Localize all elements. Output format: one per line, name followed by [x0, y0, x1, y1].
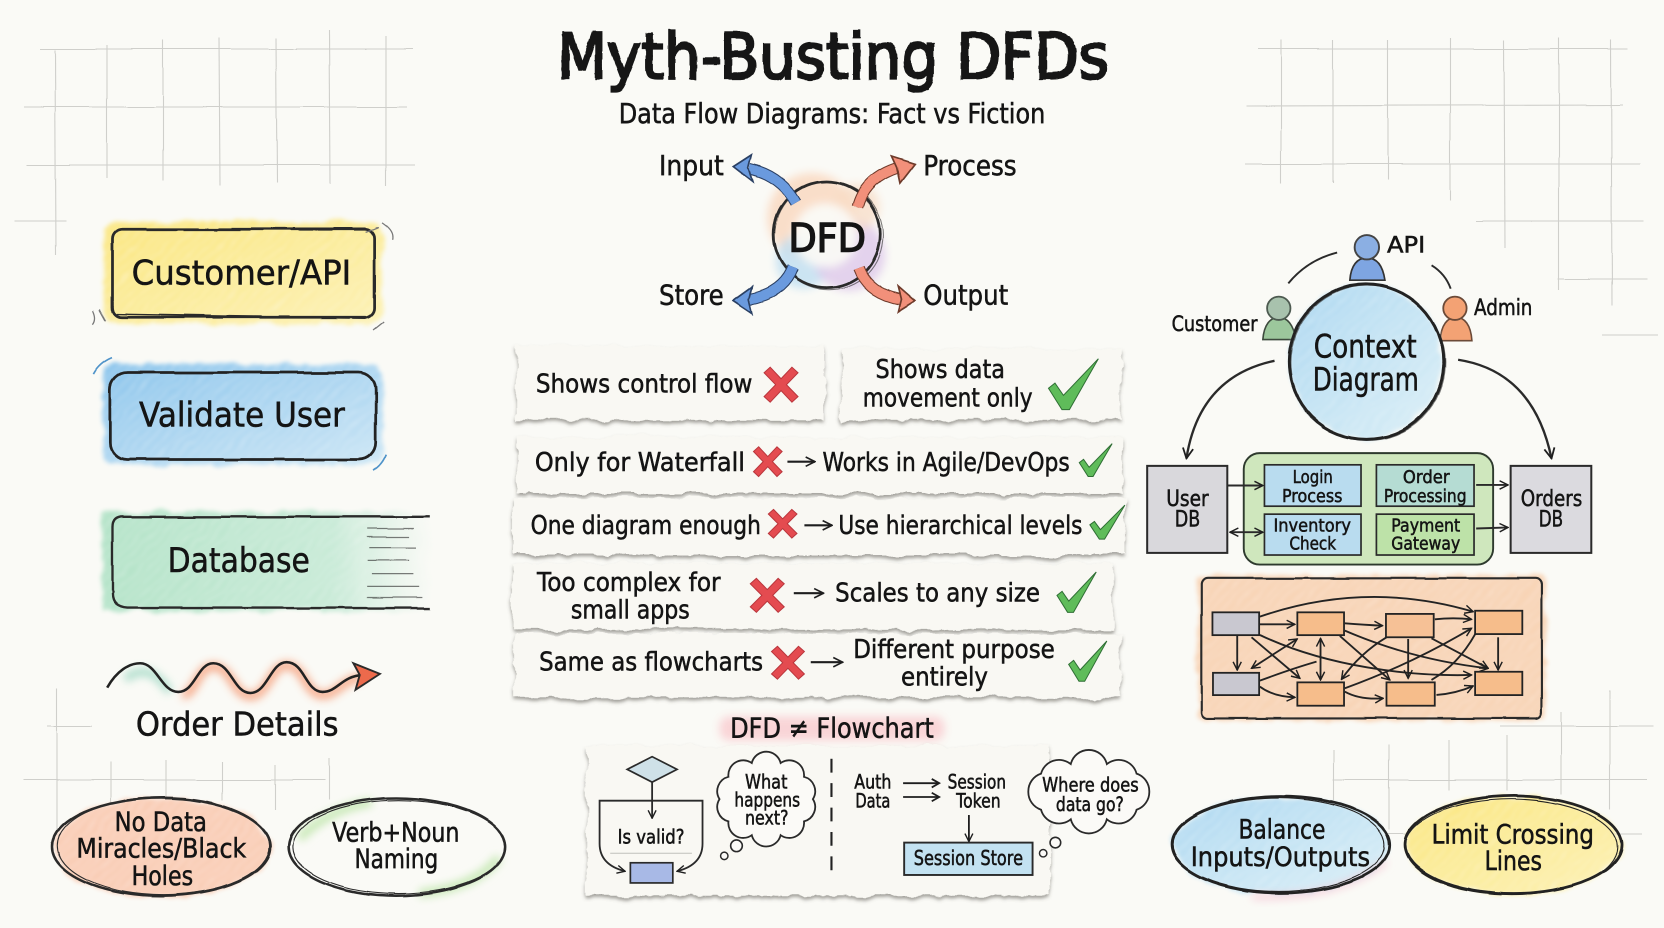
wash — [1173, 797, 1389, 895]
wash — [53, 798, 272, 898]
arrow: store — [733, 267, 793, 313]
text — [1191, 814, 1370, 873]
process: inventory — [1264, 514, 1361, 555]
icon: green check — [1090, 505, 1125, 539]
entity: customer: Customer — [1172, 312, 1258, 337]
thought cloud: what happens next: What — [745, 770, 788, 793]
wash — [1405, 797, 1622, 895]
pink edge — [1252, 862, 1386, 897]
thought cloud: what happens next: happens — [734, 789, 800, 812]
data store label: Database — [168, 541, 310, 581]
process: payment — [1376, 514, 1474, 555]
store: orders db: Orders — [1521, 486, 1582, 512]
process label: Validate User — [139, 396, 345, 436]
tangled nodes — [1212, 611, 1522, 706]
blue wash — [103, 364, 383, 465]
text: shows control flow: Shows control flow — [536, 370, 752, 400]
arrow — [787, 461, 815, 463]
comparison heading — [720, 712, 944, 745]
strip: control flow myth — [517, 346, 825, 420]
thought cloud: where does data go — [1028, 750, 1149, 857]
arrow: output — [859, 267, 915, 312]
legend: external entity — [93, 222, 393, 330]
data flow example: Token — [955, 790, 1001, 813]
process: inventory: Inventory — [1273, 516, 1351, 537]
myth text: Same as flowcharts — [539, 648, 763, 678]
thought cloud: where does data go: Where does — [1042, 774, 1139, 797]
process: payment: Gateway — [1391, 534, 1461, 555]
blue step — [630, 863, 673, 883]
store: orders db — [1511, 466, 1591, 553]
text — [332, 818, 460, 875]
thought cloud: what happens next — [717, 752, 815, 860]
tangled diagram panel — [1197, 575, 1545, 721]
hub label: DFD — [788, 217, 866, 262]
legend: process — [93, 358, 386, 470]
text: shows data movement only: movement only — [863, 383, 1033, 413]
double outline — [93, 223, 393, 330]
green edge wash — [299, 802, 499, 894]
icon: red cross — [764, 367, 798, 402]
data flow example: Auth — [854, 770, 891, 793]
outline — [289, 798, 505, 896]
myth text: small apps — [571, 596, 690, 626]
fact text — [853, 635, 1055, 693]
icon: green check — [1079, 444, 1112, 476]
myth text — [536, 568, 721, 626]
flow colour wash — [125, 665, 363, 696]
decision box outline — [600, 782, 703, 871]
context circle: Context — [1314, 328, 1417, 366]
flow label: Order Details — [136, 704, 339, 743]
flowchart example — [600, 757, 703, 883]
data flow example: Session Store — [914, 846, 1023, 870]
context circle: Diagram — [1313, 361, 1419, 399]
myth text: Only for Waterfall — [535, 448, 745, 478]
entity: API — [1350, 233, 1425, 280]
text: Verb+Noun — [332, 818, 460, 849]
connector arcs — [1186, 253, 1552, 458]
arrow — [811, 661, 843, 663]
rule: verb noun naming — [289, 798, 505, 896]
entity label: Customer/API — [132, 253, 351, 293]
text: Balance — [1238, 814, 1325, 845]
process: order — [1376, 465, 1474, 507]
hub circle wash — [767, 173, 885, 291]
process: order: Order — [1403, 467, 1450, 488]
strip: flowcharts — [515, 634, 1121, 697]
myth text: Too complex for — [536, 568, 721, 598]
process: payment: Payment — [1391, 516, 1460, 537]
data flow example: Data — [855, 790, 890, 813]
process: login: Login — [1293, 467, 1333, 488]
fact text: Scales to any size — [835, 579, 1040, 609]
label: output: Output — [923, 279, 1008, 312]
process: login — [1264, 465, 1361, 507]
entity: API: API — [1387, 233, 1425, 259]
store: user db: DB — [1175, 506, 1200, 532]
yellow wash — [104, 222, 382, 324]
outline — [93, 358, 386, 470]
arrow — [794, 592, 824, 594]
text: Inputs/Outputs — [1191, 842, 1370, 873]
context circle — [1289, 284, 1445, 440]
text: Miracles/Black — [76, 833, 247, 864]
torn paper — [587, 746, 1050, 896]
process: order: Processing — [1384, 486, 1467, 507]
panel outline — [1201, 578, 1541, 718]
open-ended outline — [112, 517, 430, 608]
text — [76, 807, 247, 892]
title: Myth-Busting DFDs — [557, 21, 1109, 95]
entity: customer — [1172, 297, 1296, 340]
store: user db: User — [1166, 486, 1209, 512]
diamond — [627, 757, 677, 782]
arrow: process — [857, 156, 915, 207]
green wash fading right — [102, 512, 433, 611]
text: Naming — [354, 844, 438, 875]
thought cloud: what happens next: next? — [745, 807, 788, 830]
store and process arrows — [1228, 485, 1508, 532]
label: input: Input — [659, 149, 724, 182]
text: No Data — [115, 807, 207, 838]
icon: red cross — [768, 509, 797, 538]
entity: admin: Admin — [1474, 295, 1532, 321]
hub circle outline — [774, 181, 883, 290]
icon: green check — [1048, 359, 1098, 410]
text: Limit Crossing — [1432, 820, 1594, 851]
arrow: input — [733, 155, 796, 203]
context diagram — [1147, 233, 1591, 565]
subtitle: Data Flow Diagrams: Fact vs Fiction — [619, 97, 1045, 130]
fact text: entirely — [901, 663, 988, 693]
process: inventory: Check — [1289, 534, 1337, 555]
decision label: Is valid? — [618, 826, 684, 849]
heading text: DFD ≠ Flowchart — [730, 712, 934, 745]
legend: data flow — [107, 662, 380, 743]
rule: balance inputs outputs — [1172, 796, 1390, 897]
squiggly line — [107, 662, 363, 693]
entity: admin — [1440, 295, 1532, 341]
arrowhead — [353, 663, 380, 690]
text: Lines — [1485, 846, 1542, 877]
fact text: Different purpose — [853, 635, 1055, 665]
strip: one diagram — [513, 498, 1126, 555]
strip: data movement fact — [843, 349, 1121, 420]
orange background — [1197, 575, 1545, 721]
process group — [1244, 453, 1493, 565]
rule: limit crossing lines — [1405, 796, 1622, 895]
comparison panel — [587, 746, 1149, 896]
pink highlight — [720, 716, 944, 741]
icon: green check — [1057, 572, 1096, 612]
label: store: Store — [659, 279, 724, 312]
text: shows data movement only — [863, 355, 1033, 413]
arrow — [804, 524, 832, 526]
data flow example — [854, 770, 1033, 875]
outline — [52, 797, 271, 896]
legend: data store — [102, 512, 433, 611]
label: process: Process — [923, 149, 1017, 182]
outline — [1172, 796, 1390, 893]
text — [1432, 820, 1594, 877]
strip: waterfall — [517, 437, 1123, 493]
store: orders db: DB — [1539, 506, 1563, 532]
process: login: Process — [1282, 486, 1342, 507]
myth text: One diagram enough — [531, 511, 761, 541]
icon: red cross — [772, 646, 804, 679]
icon: red cross — [750, 578, 784, 612]
text: shows data movement only: Shows data — [876, 355, 1005, 385]
DFD hub diagram — [659, 149, 1017, 313]
myth vs fact strips — [513, 346, 1126, 697]
text: Holes — [132, 861, 193, 892]
thought cloud: where does data go: data go? — [1056, 793, 1124, 816]
data flow example: Session — [948, 770, 1006, 793]
rule: no data miracles — [52, 797, 272, 898]
outline — [1405, 796, 1622, 895]
icon: green check — [1069, 641, 1107, 681]
fact text: Works in Agile/DevOps — [822, 448, 1070, 478]
strip: too complex — [513, 564, 1113, 629]
store: user db — [1147, 466, 1227, 553]
tangled arrows — [1237, 597, 1498, 699]
fact text: Use hierarchical levels — [838, 511, 1082, 541]
icon: red cross — [753, 447, 782, 476]
